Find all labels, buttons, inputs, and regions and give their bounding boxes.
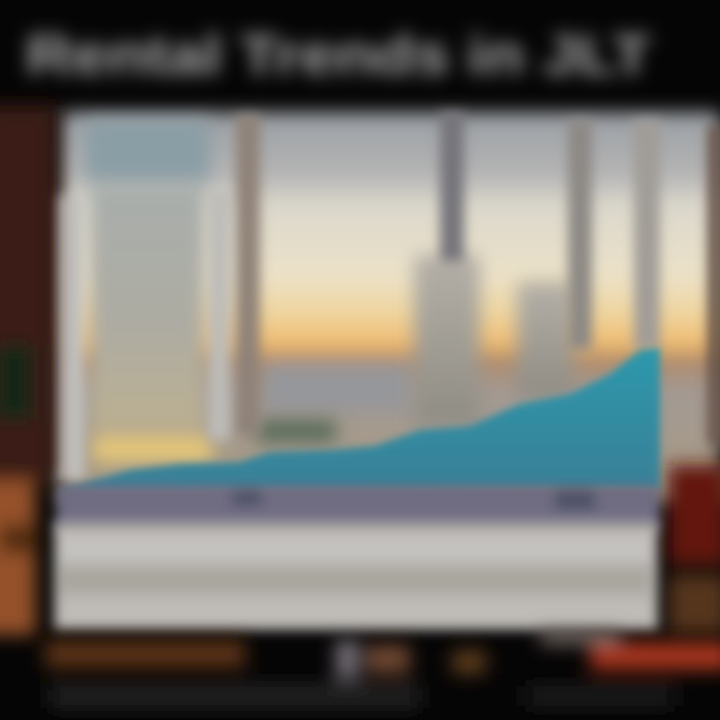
towers in skyline [85, 120, 573, 462]
bottom furniture [45, 630, 720, 708]
distant city band [262, 362, 412, 412]
left wood wall [0, 105, 56, 635]
window frames [54, 112, 720, 480]
data table [54, 522, 658, 630]
panel: city window view [60, 112, 720, 502]
chart axis band [56, 486, 660, 530]
right red chair [668, 465, 720, 633]
area chart [60, 348, 660, 492]
title: Rental Trends in JLT [26, 23, 651, 86]
